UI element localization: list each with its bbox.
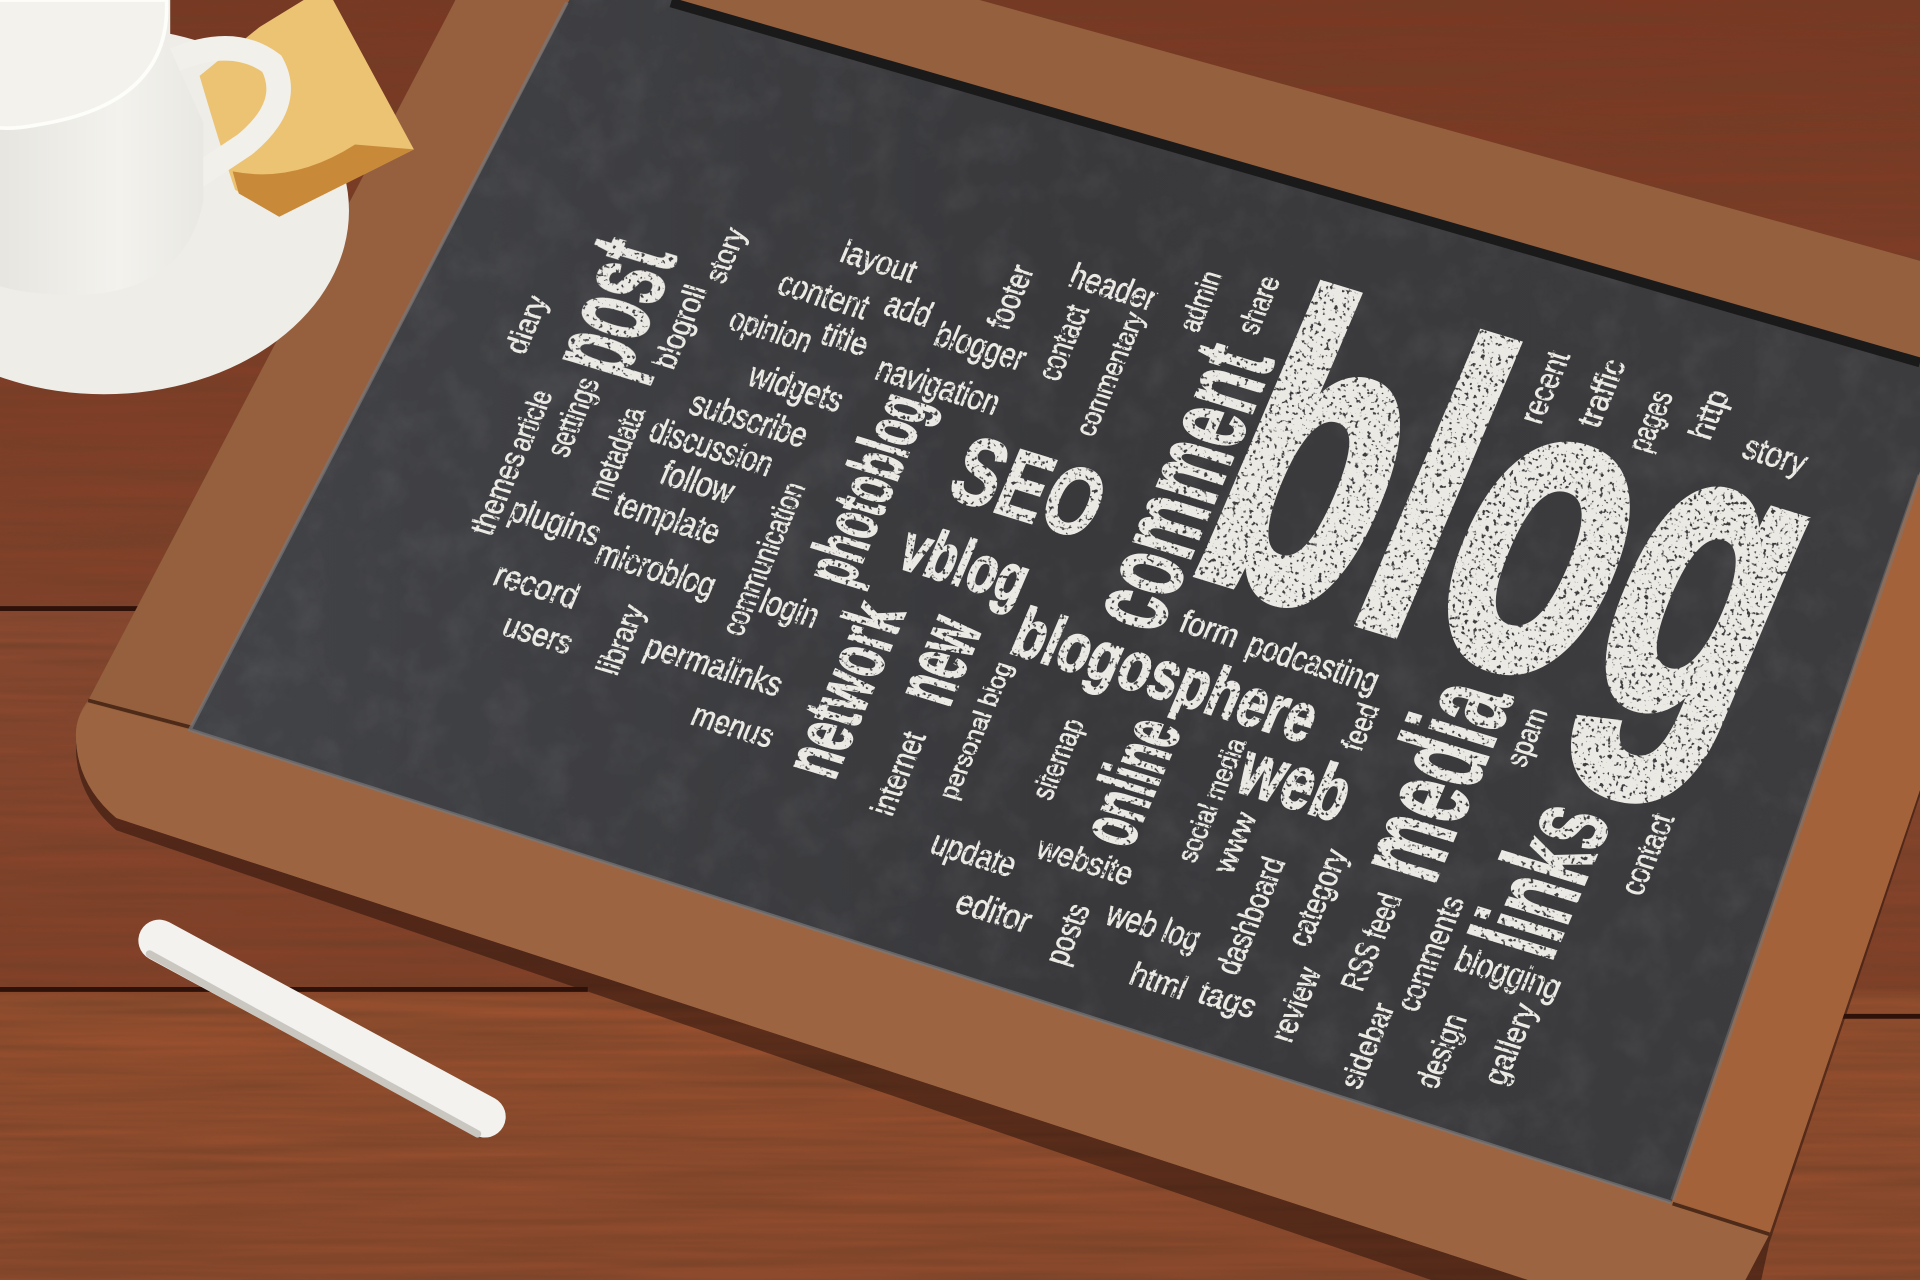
word: http: http <box>1682 386 1737 444</box>
word: template: template <box>608 484 727 552</box>
word: plugins: plugins <box>504 490 607 553</box>
word: blogger: blogger <box>929 315 1032 378</box>
word: html: html <box>1124 956 1193 1007</box>
word: header: header <box>1064 256 1164 319</box>
word: comment: comment <box>1060 330 1298 643</box>
word: online: online <box>1061 708 1199 856</box>
word: traffic: traffic <box>1570 355 1634 432</box>
word: subscribe: subscribe <box>684 383 814 455</box>
word: feed: feed <box>1334 699 1387 755</box>
word: story: story <box>697 223 753 287</box>
word: follow: follow <box>655 453 741 511</box>
word: internet: internet <box>864 728 934 820</box>
word: login: login <box>754 582 826 636</box>
word: pages: pages <box>1621 387 1681 456</box>
word: contact (upper): contact <box>1030 301 1097 385</box>
word: admin: admin <box>1171 267 1229 336</box>
word: website: website <box>1030 830 1139 893</box>
word: microblog: microblog <box>590 533 722 605</box>
word: category: category <box>1280 845 1356 951</box>
word cloud <box>463 209 1886 1093</box>
word: www: www <box>1205 807 1264 878</box>
word: web log: web log <box>1100 894 1207 959</box>
word: content: content <box>772 263 876 327</box>
word: themes: themes <box>463 447 533 539</box>
coffee cup on saucer with cake <box>0 0 414 394</box>
word: diary: diary <box>498 291 555 358</box>
word: commentary: commentary <box>1068 308 1151 439</box>
word: podcasting: podcasting <box>1241 624 1386 701</box>
word: review: review <box>1263 962 1330 1046</box>
word: discussion: discussion <box>644 410 780 484</box>
piece of white chalk <box>149 940 485 1134</box>
word: network: network <box>765 591 923 787</box>
word: communication: communication <box>714 478 812 640</box>
word: social media: social media <box>1170 734 1252 866</box>
word: form: form <box>1174 604 1245 655</box>
word: add: add <box>879 284 939 335</box>
word: new: new <box>875 605 1002 714</box>
word: blogosphere: blogosphere <box>1001 594 1330 758</box>
word: RSS feed: RSS feed <box>1334 889 1410 995</box>
word: permalinks: permalinks <box>639 628 789 704</box>
cup body <box>0 0 203 295</box>
word: sidebar: sidebar <box>1333 999 1402 1092</box>
word: metadata: metadata <box>580 402 654 504</box>
word: recent: recent <box>1513 347 1578 428</box>
word: SEO: SEO <box>936 415 1122 560</box>
word: article: article <box>501 386 560 455</box>
word: vblog: vblog <box>889 509 1042 618</box>
word: record: record <box>488 555 586 617</box>
word: update: update <box>925 823 1023 885</box>
word: photoblog: photoblog <box>787 383 945 594</box>
word: comments: comments <box>1389 892 1473 1016</box>
word: opinion: opinion <box>724 301 818 360</box>
cup inner milk <box>0 0 167 128</box>
word: contact (lower): contact <box>1613 810 1682 899</box>
word: personal blog: personal blog <box>934 659 1019 802</box>
cake crust <box>233 144 414 217</box>
cake slice <box>200 0 414 217</box>
word: sitemap: sitemap <box>1024 714 1091 804</box>
word: widgets: widgets <box>742 355 850 420</box>
word: library: library <box>589 601 652 679</box>
word: media: media <box>1325 664 1540 895</box>
saucer <box>0 27 349 394</box>
word: web: web <box>1225 724 1365 838</box>
word: footer: footer <box>980 261 1042 334</box>
word: post: post <box>518 223 703 390</box>
word: tags: tags <box>1193 975 1262 1026</box>
word: story (right): story <box>1737 427 1814 483</box>
word: users: users <box>497 607 578 662</box>
word: settings: settings <box>539 373 607 461</box>
word: title: title <box>816 316 875 364</box>
word: layout: layout <box>835 234 922 290</box>
word: design: design <box>1409 1010 1475 1093</box>
word: blogroll: blogroll <box>645 281 714 373</box>
word: gallery: gallery <box>1476 999 1545 1089</box>
word: links: links <box>1445 787 1638 972</box>
word: share: share <box>1230 272 1287 338</box>
word: dashboard: dashboard <box>1209 853 1293 979</box>
word: blogging: blogging <box>1449 939 1568 1008</box>
word: navigation: navigation <box>870 349 1006 423</box>
word: spam: spam <box>1498 704 1555 770</box>
word: menus: menus <box>686 697 780 755</box>
word: posts: posts <box>1038 900 1098 969</box>
cup handle <box>171 48 279 181</box>
word: editor: editor <box>950 882 1038 941</box>
